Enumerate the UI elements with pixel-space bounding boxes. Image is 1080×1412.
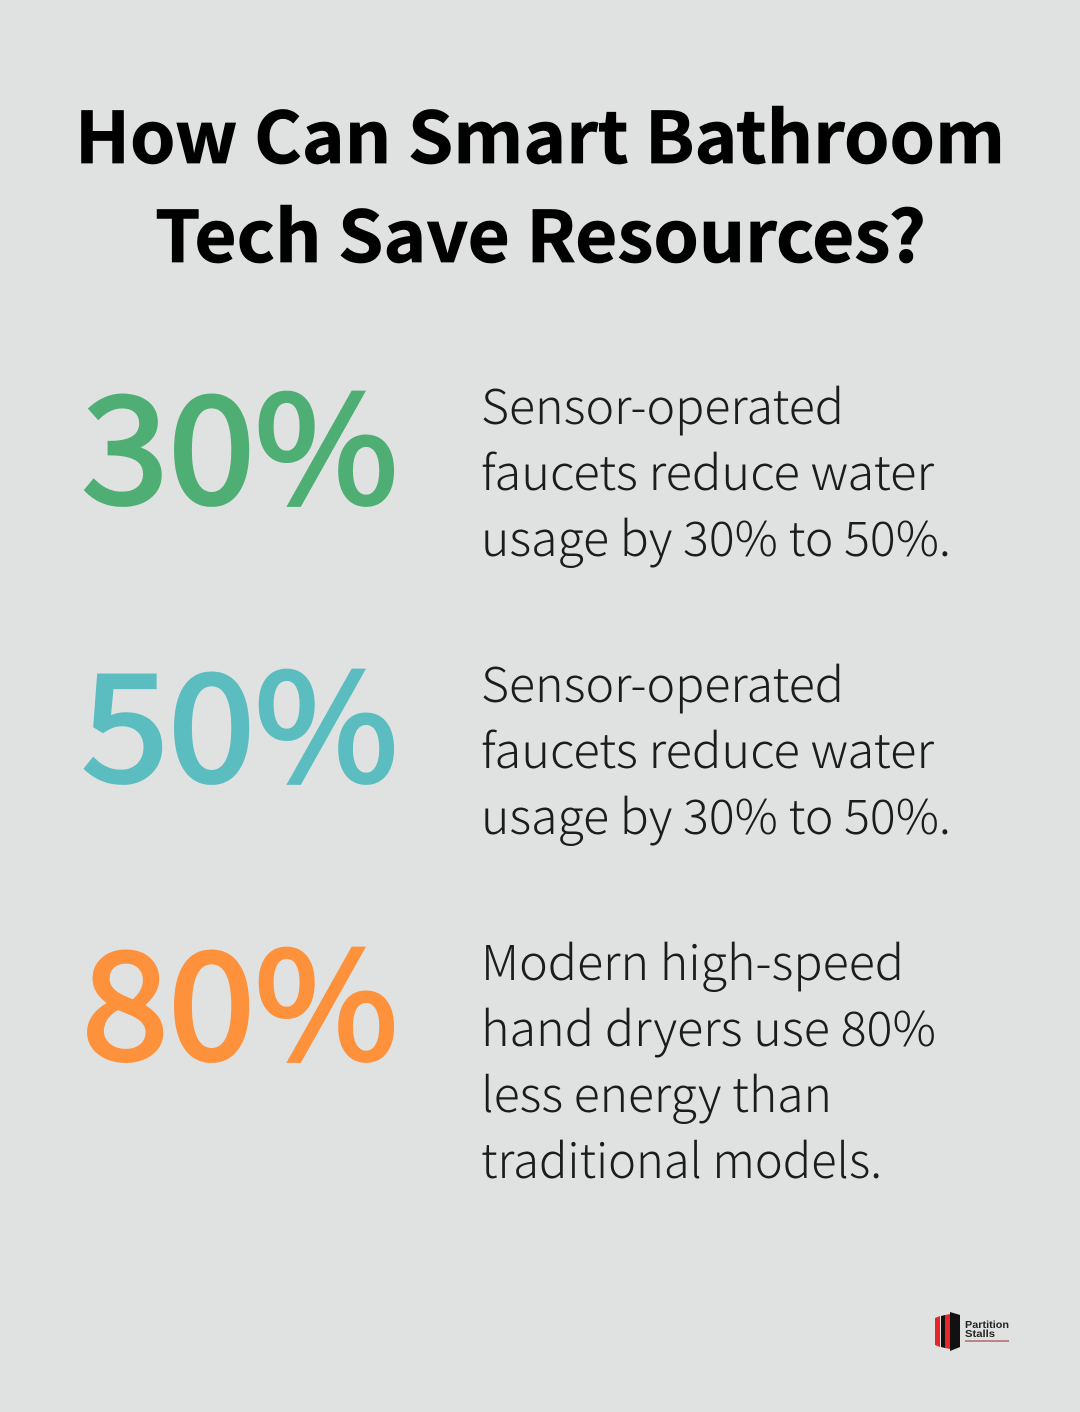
description: sensor faucets 1: Sensor-operated: [481, 368, 844, 438]
description: hand dryers: traditional models.: [481, 1122, 882, 1192]
description: sensor faucets 2: [481, 646, 951, 848]
description: sensor faucets 1: usage by 30% to 50%.: [481, 500, 951, 570]
title: [75, 82, 1005, 283]
description: hand dryers: Modern high-speed: [481, 924, 904, 994]
logo: Partition Stalls: Partition: [965, 1320, 1009, 1331]
description: hand dryers: hand dryers use 80%: [481, 990, 936, 1060]
stat: 80%: 80%: [82, 887, 398, 1102]
description: hand dryers: [481, 924, 936, 1192]
stat: 50%: 50%: [82, 609, 398, 824]
description: sensor faucets 2: usage by 30% to 50%.: [481, 778, 951, 848]
stat: 30%: 30%: [82, 331, 398, 546]
title: Tech Save Resources?: [155, 181, 926, 283]
description: sensor faucets 1: faucets reduce water: [481, 434, 935, 504]
description: sensor faucets 2: faucets reduce water: [481, 712, 935, 782]
description: sensor faucets 1: [481, 368, 951, 570]
description: hand dryers: less energy than: [481, 1056, 832, 1126]
logo: Partition Stalls: Stalls: [965, 1329, 995, 1340]
description: sensor faucets 2: Sensor-operated: [481, 646, 844, 716]
logo: Partition Stalls: [935, 1312, 1009, 1351]
title: How Can Smart Bathroom: [75, 82, 1005, 184]
